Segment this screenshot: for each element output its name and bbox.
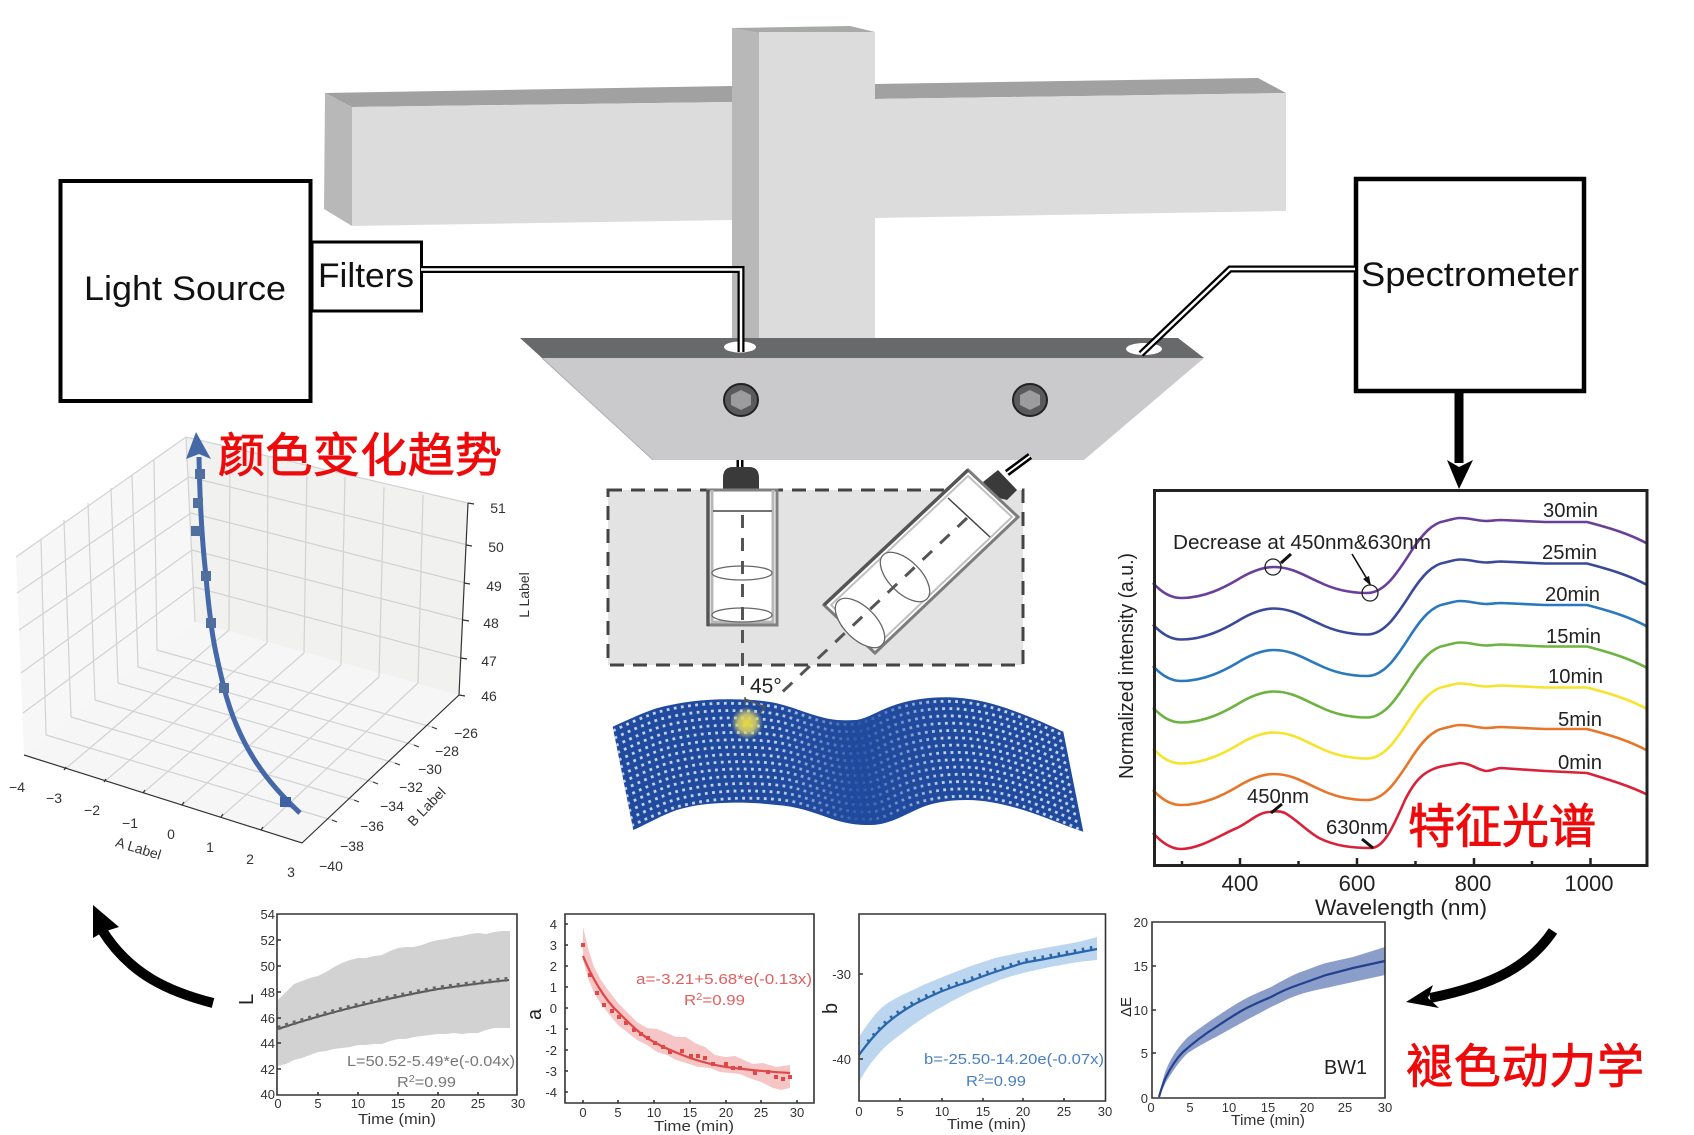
chart: delta E vs time: 15	[1261, 1100, 1275, 1115]
chart: a vs time: 0	[550, 1001, 557, 1016]
a fit line	[583, 956, 790, 1073]
x axis tick labels	[1222, 871, 1613, 896]
chart: L vs time: 25	[471, 1096, 485, 1111]
chart: a vs time: -2	[545, 1043, 557, 1058]
light source box	[60, 181, 310, 401]
peak annotations: 630nm	[1326, 817, 1388, 839]
optical fibre: filters to probe	[421, 270, 741, 352]
chart: a vs time: Time (min)	[654, 1118, 734, 1135]
L axis labels: 46	[481, 688, 497, 704]
chart: L vs time: Time (min)	[358, 1111, 436, 1128]
delta E uncertainty band	[1159, 947, 1385, 1097]
chart: delta E vs time: 20	[1134, 915, 1148, 930]
chart: a vs time: 20	[719, 1105, 733, 1120]
chart: b vs time: -40	[832, 1052, 851, 1067]
B axis labels: −30	[418, 761, 442, 777]
A axis labels: −1	[122, 815, 138, 831]
chart: a vs time: 15	[683, 1105, 697, 1120]
chart: delta E vs time: ΔE	[1118, 997, 1135, 1017]
time labels: 5min	[1558, 709, 1602, 731]
support frame: gantry beam and column	[324, 26, 1286, 340]
dashed measurement housing	[608, 490, 1023, 665]
spectrometer box	[1356, 179, 1584, 391]
chart frame and ticks	[1154, 490, 1647, 866]
chart: a vs time: 0	[579, 1105, 587, 1120]
chart: a vs time: R	[684, 992, 695, 1009]
chart: delta E vs time: 10	[1134, 1003, 1148, 1018]
L fit line	[278, 980, 509, 1029]
L uncertainty band	[278, 931, 510, 1066]
chart: L vs time	[236, 907, 525, 1128]
chart: b vs time: 15	[976, 1104, 990, 1119]
b fit line	[859, 949, 1097, 1055]
3D color trend plot	[9, 432, 532, 880]
vertical probe	[708, 460, 777, 626]
chart: L vs time: 2	[409, 1074, 415, 1085]
x axis tick labels: 1000	[1565, 871, 1613, 896]
plot axes	[24, 503, 474, 843]
chart: a vs time: -4	[545, 1085, 557, 1100]
chart: a vs time: 1	[550, 980, 557, 995]
chart: a vs time: -3	[545, 1064, 557, 1079]
filters box: Filters	[318, 257, 414, 295]
optical head plate	[520, 338, 1204, 460]
B axis labels: −32	[399, 779, 423, 795]
vertical column	[732, 26, 875, 340]
B axis labels: B Label	[404, 784, 449, 829]
fibre hole right	[1126, 343, 1162, 355]
A axis labels: −2	[84, 802, 100, 818]
chart: L vs time: 15	[391, 1096, 405, 1111]
angle label: 45°	[750, 675, 782, 698]
decrease annotation	[1173, 532, 1431, 601]
B axis labels: −38	[340, 838, 364, 854]
filters box	[312, 242, 422, 311]
L axis labels	[481, 500, 532, 704]
chart: delta E vs time: 0	[1147, 1100, 1155, 1115]
angled probe	[824, 456, 1030, 656]
chart: L vs time: 44	[261, 1036, 275, 1051]
screw left	[724, 384, 758, 416]
b axes	[859, 914, 1106, 1101]
chart: b vs time: 30	[1098, 1104, 1112, 1119]
A axis labels: 2	[246, 851, 254, 867]
time labels	[1542, 500, 1603, 774]
curved arrow to 3D plot	[93, 905, 213, 1003]
chart: delta E vs time: BW1	[1324, 1057, 1367, 1079]
screw right	[1013, 384, 1047, 416]
chart: L vs time: 30	[511, 1096, 525, 1111]
chart: L vs time: 46	[261, 1011, 275, 1026]
x axis title: Wavelength (nm)	[1315, 895, 1487, 920]
red title: fading kinetics: 褪色动力学	[1406, 1040, 1644, 1093]
chart: b vs time: b	[820, 1003, 842, 1014]
light source box: Light Source	[84, 270, 286, 308]
chart: a vs time: 2	[550, 959, 557, 974]
chart: L vs time: 54	[261, 907, 275, 922]
chart: a vs time: a	[524, 1008, 546, 1020]
chart: b vs time: -30	[832, 967, 851, 982]
chart: a vs time: 2	[696, 992, 703, 1003]
chart: delta E vs time	[1118, 915, 1392, 1129]
time labels: 30min	[1543, 500, 1598, 522]
left beam	[324, 86, 732, 226]
time labels: 20min	[1545, 584, 1600, 606]
B axis labels: −28	[435, 743, 459, 759]
chart: delta E vs time: 5	[1186, 1100, 1194, 1115]
chart: a vs time: 5	[614, 1105, 622, 1120]
a uncertainty band	[583, 927, 790, 1090]
peak annotations	[1247, 786, 1388, 848]
x axis tick labels: 600	[1339, 871, 1375, 896]
A axis labels: 1	[206, 839, 214, 855]
B axis labels: −26	[454, 725, 478, 741]
chart: a vs time: 25	[754, 1105, 768, 1120]
trend curve with arrow	[186, 432, 300, 813]
decrease annotation: Decrease at 450nm&630nm	[1173, 532, 1431, 554]
dashed optical axes	[742, 515, 967, 697]
small angle arc	[745, 697, 765, 713]
chart: L vs time: 10	[351, 1096, 365, 1111]
chart: delta E vs time: Time (min)	[1231, 1112, 1305, 1129]
chart: delta E vs time: 0	[1141, 1091, 1148, 1106]
L axes	[277, 914, 517, 1095]
chart: L vs time: 48	[261, 985, 275, 1000]
peak annotations: 450nm	[1247, 786, 1309, 808]
fabric sample	[613, 695, 1083, 835]
curved arrow from spectra to kinetics	[1406, 931, 1553, 1008]
time labels: 10min	[1548, 666, 1603, 688]
L axis labels: 49	[486, 578, 502, 594]
A axis labels: 3	[287, 864, 295, 880]
b uncertainty band	[859, 937, 1097, 1083]
chart: L vs time: 52	[261, 933, 275, 948]
time labels: 25min	[1542, 542, 1597, 564]
L axis labels: L Label	[516, 572, 532, 618]
plot walls	[16, 437, 468, 843]
chart: L vs time: 5	[314, 1096, 322, 1111]
chart: a vs time: =0.99	[702, 992, 745, 1009]
chart: b vs time: R	[966, 1073, 977, 1090]
chart: b vs time: 0	[855, 1104, 863, 1119]
chart: a vs time: 30	[790, 1105, 804, 1120]
a data points	[581, 943, 792, 1081]
illuminated spot	[731, 707, 763, 739]
A axis labels	[9, 779, 295, 880]
spectra chart	[1116, 490, 1648, 920]
B axis labels	[319, 725, 478, 874]
chart: delta E vs time: 5	[1141, 1046, 1148, 1061]
fibre hole left	[724, 342, 756, 352]
chart: b vs time: =0.99	[984, 1073, 1026, 1090]
A axis labels: 0	[167, 826, 175, 842]
chart: b vs time: 2	[978, 1073, 985, 1084]
chart: delta E vs time: 25	[1338, 1100, 1352, 1115]
time labels: 0min	[1558, 752, 1602, 774]
A axis labels: −3	[46, 790, 62, 806]
chart: a vs time: 3	[550, 938, 557, 953]
arrow: spectrometer to spectra	[1447, 393, 1473, 489]
chart: b vs time: 20	[1016, 1104, 1030, 1119]
chart: delta E vs time: 15	[1134, 959, 1148, 974]
chart: delta E vs time: 30	[1378, 1100, 1392, 1115]
red title: characteristic spectra: 特征光谱	[1408, 800, 1596, 853]
time labels: 15min	[1546, 626, 1601, 648]
optical fibre: spectrometer to probe	[1141, 269, 1355, 354]
chart: b vs time: 10	[935, 1104, 949, 1119]
chart: L vs time: =0.99	[415, 1074, 456, 1091]
right beam	[875, 78, 1286, 218]
chart: L vs time: 20	[431, 1096, 445, 1111]
chart: L vs time: R	[397, 1074, 408, 1091]
spectrometer box: Spectrometer	[1361, 256, 1579, 294]
x axis tick labels: 400	[1222, 871, 1258, 896]
spectra curves	[1153, 518, 1648, 849]
chart: b vs time: b=-25.50-14.20e(-0.07x)	[924, 1051, 1104, 1068]
chart: a vs time	[524, 914, 814, 1135]
chart: b vs time: 25	[1057, 1104, 1071, 1119]
x axis tick labels: 800	[1455, 871, 1491, 896]
A axis labels: A Label	[114, 834, 163, 863]
L axis labels: 51	[490, 500, 506, 516]
chart: L vs time: L	[236, 994, 258, 1005]
chart: delta E vs time: 20	[1300, 1100, 1314, 1115]
delta E axes	[1152, 922, 1385, 1098]
chart: a vs time: 10	[647, 1105, 661, 1120]
B axis labels: −34	[380, 798, 404, 814]
B axis labels: −36	[360, 818, 384, 834]
A axis labels: −4	[9, 779, 25, 795]
B axis labels: −40	[319, 858, 343, 874]
chart: a vs time: -1	[545, 1022, 557, 1037]
L axis labels: 47	[481, 653, 497, 669]
a axes	[565, 914, 814, 1103]
L axis labels: 48	[483, 615, 499, 631]
chart: b vs time: 5	[896, 1104, 904, 1119]
chart: a vs time: a=-3.21+5.68*e(-0.13x)	[636, 971, 812, 988]
delta E fit line	[1159, 961, 1385, 1097]
chart: L vs time: 40	[261, 1087, 275, 1102]
chart: a vs time: 4	[550, 917, 557, 932]
chart: b vs time: Time (min)	[947, 1116, 1026, 1133]
chart: L vs time: L=50.52-5.49*e(-0.04x)	[347, 1053, 515, 1070]
chart: L vs time: 0	[274, 1096, 282, 1111]
chart: L vs time: 50	[261, 959, 275, 974]
red title: color change trend: 颜色变化趋势	[218, 429, 502, 482]
L axis labels: 50	[488, 539, 504, 555]
chart: L vs time: 42	[261, 1062, 275, 1077]
chart: delta E vs time: 10	[1222, 1100, 1236, 1115]
chart: b vs time	[820, 914, 1112, 1133]
y axis title: Normalized intensity (a.u.)	[1116, 553, 1138, 779]
